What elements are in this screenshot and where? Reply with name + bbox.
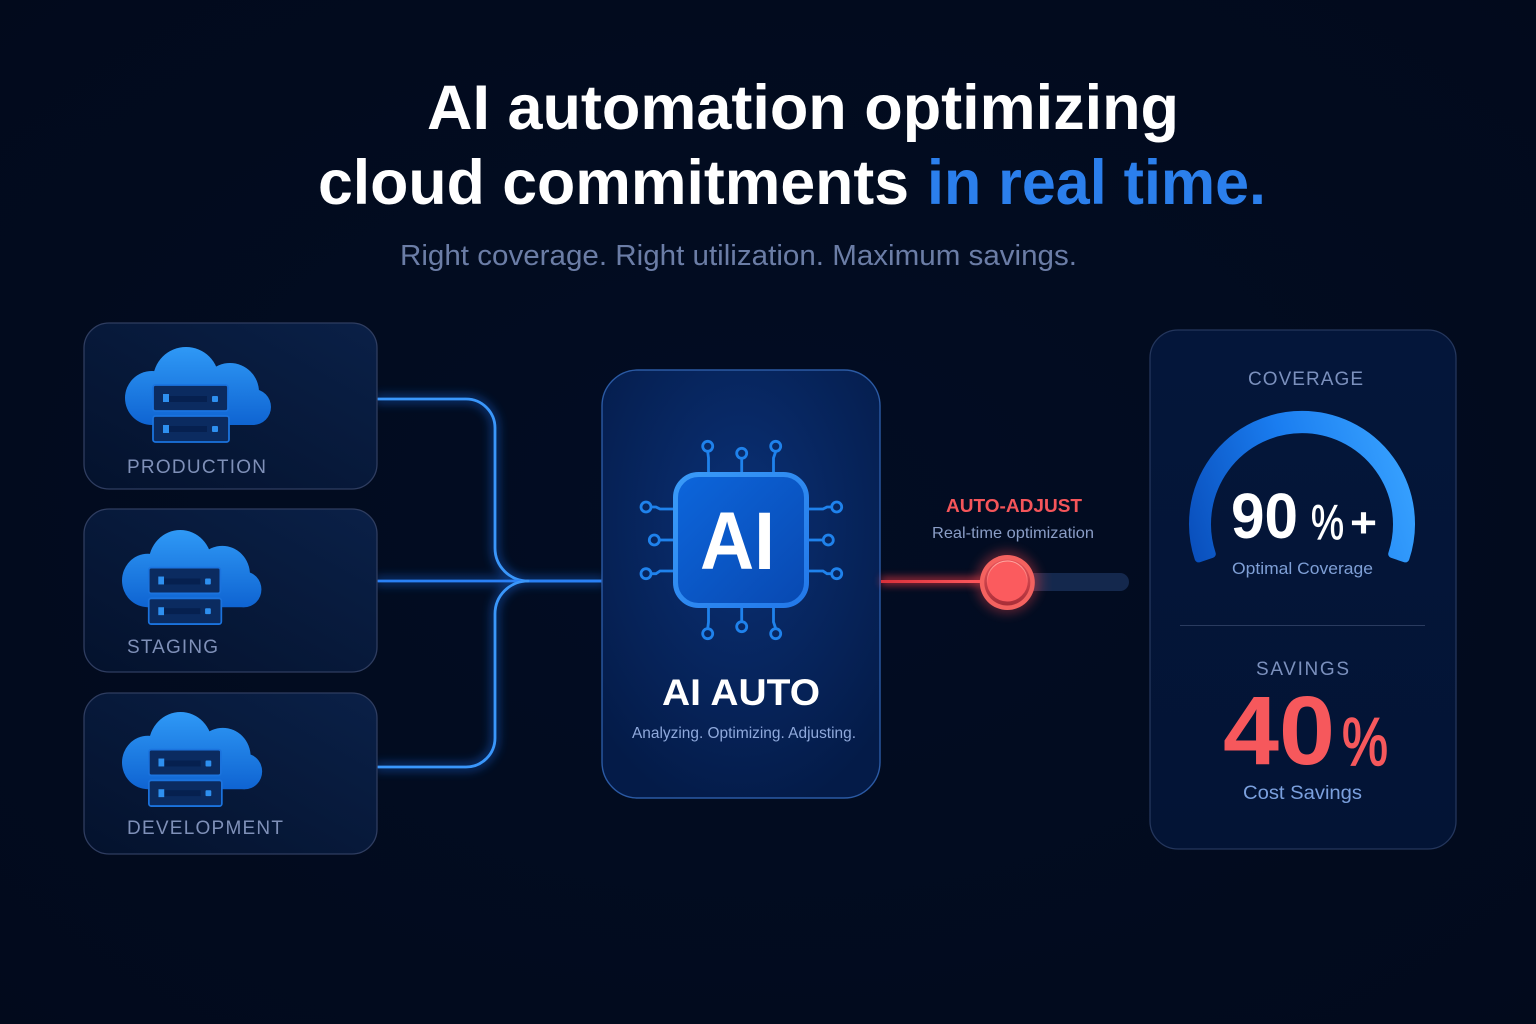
slider track	[1020, 573, 1129, 591]
caption: AI auto: Analyzing. Optimizing. Adjusting.	[632, 725, 856, 742]
panel: AI auto	[602, 370, 880, 798]
icon: AI chip	[641, 441, 842, 639]
caption: optimal coverage: Optimal Coverage	[1232, 559, 1373, 578]
icon: development cloud server	[122, 712, 262, 806]
label: staging: STAGING	[127, 637, 218, 658]
icon: AI chip: AI	[700, 496, 775, 587]
label: auto-adjust: AUTO-ADJUST	[946, 496, 1082, 516]
auto-adjust slider	[881, 496, 1129, 614]
value: 90%+: %	[1311, 496, 1344, 550]
slider knob	[975, 550, 1039, 614]
panel: staging	[84, 509, 377, 672]
icon: production cloud server	[125, 347, 271, 442]
caption: cost savings: Cost Savings	[1243, 783, 1362, 804]
panel: development	[84, 693, 377, 854]
value: 90%+	[1231, 480, 1377, 552]
subtitle: Right coverage. Right utilization. Maximum savings.	[400, 240, 1077, 272]
title: AI automation optimizing	[427, 73, 1179, 143]
value: 40%	[1223, 676, 1388, 785]
panel: metrics	[1150, 330, 1456, 849]
heading: AI auto: AI AUTO	[662, 672, 820, 713]
title	[318, 73, 1266, 218]
title: cloud commitments	[318, 148, 909, 218]
gauge: coverage	[1193, 415, 1411, 558]
panel: production	[84, 323, 377, 489]
value: 90%+: +	[1350, 499, 1377, 546]
value: 90%+: 90	[1231, 480, 1298, 552]
caption: real-time optimization: Real-time optimization	[932, 525, 1094, 542]
title: in real time.	[927, 148, 1266, 218]
value: 40%: %	[1342, 704, 1388, 780]
value: 40%: 40	[1223, 676, 1335, 785]
heading: savings: SAVINGS	[1256, 659, 1349, 680]
label: development: DEVELOPMENT	[127, 818, 283, 839]
icon: staging cloud server	[122, 530, 261, 624]
red line	[881, 577, 985, 585]
heading: coverage: COVERAGE	[1248, 369, 1363, 390]
connector lines	[378, 399, 602, 767]
label: production: PRODUCTION	[127, 457, 266, 478]
